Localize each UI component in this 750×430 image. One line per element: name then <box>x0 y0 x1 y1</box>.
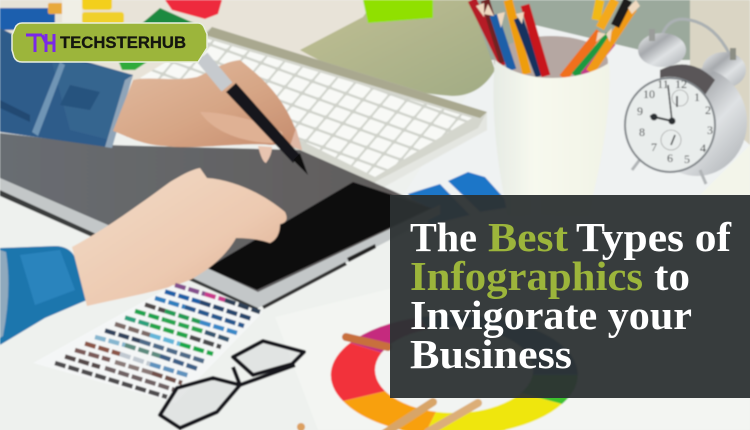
clock body <box>647 68 747 176</box>
clock numbers: 4 <box>700 141 706 155</box>
clock numbers: 10 <box>643 87 655 101</box>
clock numbers: 11 <box>657 77 669 91</box>
title line 2: to <box>654 253 690 299</box>
keyboard <box>135 27 487 192</box>
clock numbers: 7 <box>651 140 657 154</box>
clock bells <box>638 29 746 88</box>
clock numbers: 1 <box>694 90 700 104</box>
dark title panel <box>390 195 750 398</box>
title line 4: Business <box>410 331 572 377</box>
pen <box>202 57 308 175</box>
title line 1: Types of <box>576 214 732 260</box>
clock feet <box>632 158 706 184</box>
brand name: TECHSTERHUB <box>60 33 186 52</box>
alarm clock <box>625 19 747 184</box>
clock handle <box>661 19 730 55</box>
logo badge <box>12 23 207 62</box>
clock numbers: 8 <box>639 125 645 139</box>
pen holder cup <box>472 0 640 215</box>
clock numbers: 12 <box>675 77 687 91</box>
clock numbers: 2 <box>705 103 711 117</box>
title line 2: Infographics <box>410 253 643 299</box>
clock body shadow <box>660 64 715 95</box>
clock numbers: 6 <box>667 151 673 165</box>
colored tabs top left <box>0 0 222 70</box>
clock numbers: 5 <box>684 152 690 166</box>
clock numbers <box>637 77 713 166</box>
title <box>410 214 732 377</box>
clock numbers: 3 <box>707 123 713 137</box>
clock hands <box>650 85 688 150</box>
crayons <box>297 337 478 430</box>
title line 1: The <box>410 214 477 260</box>
pencils <box>472 0 633 78</box>
color wheel <box>331 315 578 430</box>
glasses <box>160 341 304 428</box>
lower hand <box>72 168 287 306</box>
clock numbers: 9 <box>637 104 643 118</box>
denim sleeve lower <box>0 246 87 345</box>
denim sleeve upper <box>0 28 133 148</box>
sticky note <box>363 0 433 23</box>
pencil tips <box>476 0 640 42</box>
title line 3: Invigorate your <box>410 292 692 338</box>
color swatch sheet <box>33 285 263 403</box>
upper hand <box>113 60 302 163</box>
clock face <box>625 78 715 172</box>
title line 1: Best <box>488 214 568 260</box>
icon: TH monogram <box>26 34 54 52</box>
monitor base <box>300 0 495 96</box>
title line 1 <box>410 214 732 260</box>
paper sheet <box>275 200 750 430</box>
graphics tablet <box>0 133 440 311</box>
blue tabs <box>408 172 512 225</box>
